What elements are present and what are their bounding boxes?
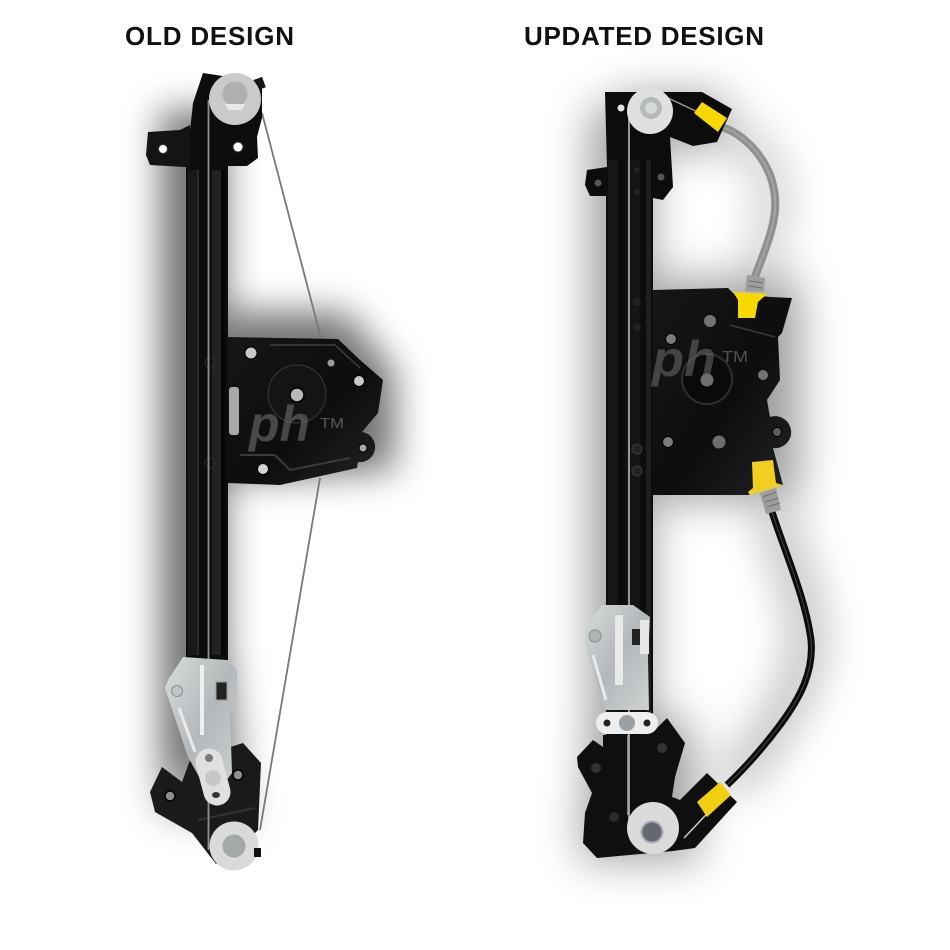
guide rail: [585, 92, 732, 830]
top pulley: [627, 88, 673, 134]
motor plate: [653, 288, 792, 495]
white cable clip: [205, 754, 221, 798]
grey outer cable: [722, 127, 775, 277]
watermark: old design: [247, 396, 344, 452]
threaded fittings: [745, 275, 781, 514]
yellow ferrules: [694, 102, 783, 817]
watermark: old design: TM: [320, 415, 344, 432]
white cable clip: [604, 715, 650, 815]
heading: old design: OLD DESIGN: [125, 21, 294, 51]
shadow: old design: [155, 110, 395, 830]
motor plate: [228, 337, 383, 485]
lower bracket: [150, 743, 261, 864]
bottom pulley: [210, 822, 261, 870]
top pulley: [209, 73, 261, 125]
black outer cable: [727, 512, 811, 785]
watermark: updated design: ph: [650, 331, 716, 387]
watermark: updated design: [650, 331, 748, 387]
watermark: updated design: TM: [722, 349, 748, 366]
window carrier: zinc slider: [585, 605, 650, 710]
product: old design window regulator: [146, 73, 383, 870]
cable wire: old design: [260, 113, 321, 830]
heading: updated design: UPDATED DESIGN: [524, 21, 764, 51]
window carrier: zinc slider: [165, 657, 237, 800]
lower bracket: [577, 718, 737, 858]
shadow: updated design: [580, 95, 807, 860]
guide rail: [146, 73, 266, 850]
watermark: old design: ph: [247, 396, 310, 452]
product: updated design window regulator: [577, 88, 811, 858]
bottom pulley: [627, 802, 679, 854]
